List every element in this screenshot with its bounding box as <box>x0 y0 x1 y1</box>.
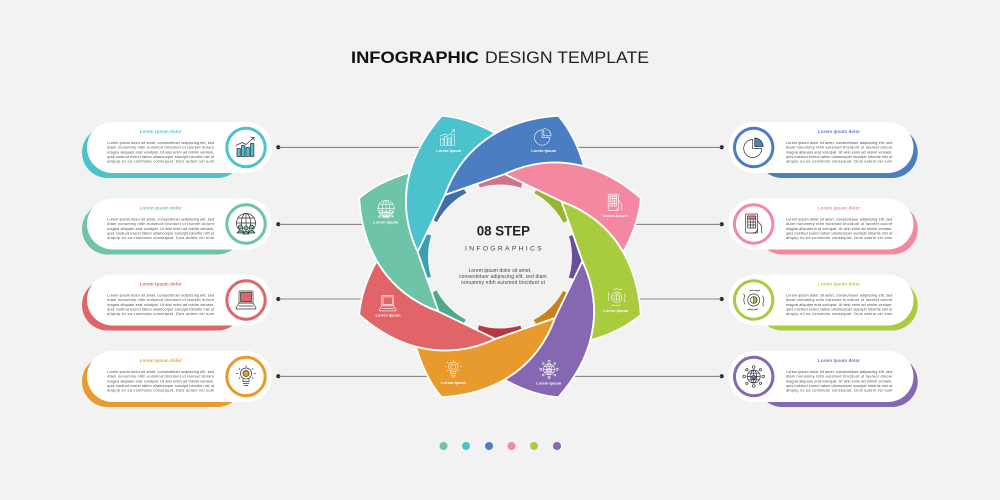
petal: teal <box>362 98 516 252</box>
petal: green <box>562 202 641 340</box>
panel: left card orange: Lorem ipsum dolor sit amet, consectetuer adipiscing elit, sed <box>107 370 214 374</box>
connector: network step <box>550 374 724 378</box>
panel: left card red: Lorem Ipsum dolor <box>140 282 182 287</box>
title: DESIGN TEMPLATE <box>485 48 649 67</box>
panel: left card mint: Lorem ipsum dolor sit amet, consectetuer adipiscing elit, sed <box>107 218 214 222</box>
panel: right card purple <box>728 351 918 407</box>
panel: right card blue: Lorem ipsum dolor sit amet, consectetuer adipiscing elit, sed <box>786 141 892 145</box>
panel: right card purple: quis nostrud exerci tation ullamcorper suscipit lobortis nisl ut <box>786 384 892 388</box>
pagination dots <box>440 442 561 450</box>
center text: 08 STEP <box>477 223 530 239</box>
panel: left card mint: Lorem Ipsum dolor <box>140 206 182 211</box>
panel: left card orange: diam nonummy nibh euismod tincidunt ut laoreet dolore <box>107 375 214 379</box>
panel: right card pink: aliquip ex ea commodo consequat. Duis autem vel eum <box>786 236 892 240</box>
petal label: blue pie: Lorem Ipsum <box>531 148 557 153</box>
flower diagram <box>341 98 659 415</box>
petal label: orange bulb <box>441 360 467 385</box>
panel: right card blue: Lorem Ipsum dolor <box>818 129 860 134</box>
petal label: teal chart: Lorem Ipsum <box>436 148 462 153</box>
panel: right card green: Lorem Ipsum dolor <box>818 282 860 287</box>
title <box>351 48 649 67</box>
petal label: pink calculator: Lorem Ipsum <box>603 213 628 218</box>
petal label: teal chart <box>436 130 462 153</box>
panel: right card purple: magna aliquam erat volutpat. Ut wisi enim ad minim veniam, <box>786 379 892 383</box>
panel: left card red: diam nonummy nibh euismod tincidunt ut laoreet dolore <box>107 298 214 302</box>
inner dark wedges <box>416 172 584 341</box>
panel: right card green: magna aliquam erat volutpat. Ut wisi enim ad minim veniam, <box>786 303 892 307</box>
panel: right card green: aliquip ex ea commodo consequat. Duis autem vel eum <box>786 312 892 316</box>
connector: gear step <box>600 297 724 301</box>
center circle <box>428 185 572 328</box>
panel: left card red: aliquip ex ea commodo consequat. Duis autem vel eum <box>107 312 214 316</box>
panel: left card teal: aliquip ex ea commodo consequat. Duis autem vel eum <box>107 160 214 164</box>
panel: right card pink: magna aliquam erat volutpat. Ut wisi enim ad minim veniam, <box>786 227 892 231</box>
petal label: red laptop: Lorem Ipsum <box>376 313 401 318</box>
title: INFOGRAPHIC <box>351 48 479 67</box>
center text <box>459 223 547 286</box>
panel: left card orange: aliquip ex ea commodo consequat. Duis autem vel eum <box>107 389 214 393</box>
connector: laptop step <box>276 297 400 301</box>
panel: left card mint: magna aliquam erat volutpat. Ut wisi enim ad minim veniam, <box>107 227 214 231</box>
panel: right card pink <box>728 198 918 254</box>
panel: left card teal: Lorem Ipsum dolor <box>140 129 182 134</box>
connector: chart step <box>276 145 440 149</box>
panel: left card mint <box>82 198 272 254</box>
petal: purple <box>484 261 638 415</box>
panel: right card purple: diam nonummy nibh euismod tincidunt ut laoreet dolore <box>786 375 892 379</box>
petal label: red laptop <box>376 296 401 318</box>
center text: Lorem ipsum dolor sit amet, <box>468 268 532 274</box>
petal label: purple network <box>536 360 562 385</box>
panel: left card red <box>82 274 272 330</box>
petal label: orange bulb: Lorem Ipsum <box>441 380 467 385</box>
panel: left card red: Lorem ipsum dolor sit amet, consectetuer adipiscing elit, sed <box>107 294 214 298</box>
panel: right card purple: aliquip ex ea commodo consequat. Duis autem vel eum <box>786 389 892 393</box>
panel: right card green: Lorem ipsum dolor sit amet, consectetuer adipiscing elit, sed <box>786 294 892 298</box>
panel: right card pink: diam nonummy nibh euismod tincidunt ut laoreet dolore <box>786 222 892 226</box>
panel: right card blue <box>728 122 918 178</box>
center text: INFOGRAPHICS <box>465 246 542 253</box>
center text: consectetuer adipiscing elit, sed diam <box>459 274 547 280</box>
panel: left card red: quis nostrud exerci tation ullamcorper suscipit lobortis nisl ut <box>107 308 214 312</box>
panel: left card teal: diam nonummy nibh euismod tincidunt ut laoreet dolore <box>107 146 214 150</box>
petal: red <box>341 241 495 395</box>
panel: left card orange <box>82 351 272 407</box>
center text: nonummy nibh euismod tincidunt ut <box>461 280 546 286</box>
panel: left card teal: quis nostrud exerci tation ullamcorper suscipit lobortis nisl ut <box>107 155 214 159</box>
petal label: green gear <box>603 289 629 313</box>
petal: orange <box>416 318 555 397</box>
petal label: green gear: Lorem Ipsum <box>603 308 629 313</box>
petal: blue <box>445 116 584 195</box>
panel: right card purple: Lorem ipsum dolor sit amet, consectetuer adipiscing elit, sed <box>786 370 892 374</box>
petal label: mint people globe: Lorem Ipsum <box>373 219 399 224</box>
petal label: pink calculator <box>603 194 628 218</box>
panel: right card pink: quis nostrud exerci tation ullamcorper suscipit lobortis nisl ut <box>786 232 892 236</box>
petal label: blue pie <box>531 129 557 153</box>
connector: bulb step <box>276 374 450 378</box>
panel: right card green <box>728 274 918 330</box>
panel: right card pink: Lorem ipsum dolor sit amet, consectetuer adipiscing elit, sed <box>786 218 892 222</box>
panel: left card orange: quis nostrud exerci tation ullamcorper suscipit lobortis nisl ut <box>107 384 214 388</box>
panel: right card green: quis nostrud exerci tation ullamcorper suscipit lobortis nisl ut <box>786 308 892 312</box>
panel: left card teal <box>82 122 272 178</box>
panel: left card teal: magna aliquam erat volutpat. Ut wisi enim ad minim veniam, <box>107 150 214 154</box>
panel: right card blue: magna aliquam erat volutpat. Ut wisi enim ad minim veniam, <box>786 150 892 154</box>
petal: pink <box>505 118 659 272</box>
petal label: mint people globe <box>373 200 399 224</box>
panel: left card mint: diam nonummy nibh euismod tincidunt ut laoreet dolore <box>107 222 214 226</box>
panel: right card pink: Lorem Ipsum dolor <box>818 206 860 211</box>
panel: left card mint: quis nostrud exerci tation ullamcorper suscipit lobortis nisl ut <box>107 232 214 236</box>
petal label: purple network: Lorem Ipsum <box>536 380 562 385</box>
connector: pie step <box>560 145 724 149</box>
panel: right card blue: quis nostrud exerci tation ullamcorper suscipit lobortis nisl ut <box>786 155 892 159</box>
panel: right card blue: diam nonummy nibh euismod tincidunt ut laoreet dolore <box>786 146 892 150</box>
connector: calculator step <box>600 222 724 226</box>
panel: right card blue: aliquip ex ea commodo consequat. Duis autem vel eum <box>786 160 892 164</box>
panel: left card teal: Lorem ipsum dolor sit amet, consectetuer adipiscing elit, sed <box>107 141 214 145</box>
panel: right card green: diam nonummy nibh euismod tincidunt ut laoreet dolore <box>786 298 892 302</box>
petal: mint <box>359 172 438 312</box>
connector: people globe step <box>276 222 400 226</box>
panel: left card orange: Lorem Ipsum dolor <box>140 358 182 363</box>
panel: left card mint: aliquip ex ea commodo consequat. Duis autem vel eum <box>107 236 214 240</box>
panel: right card purple: Lorem Ipsum dolor <box>818 358 860 363</box>
panel: left card red: magna aliquam erat volutpat. Ut wisi enim ad minim veniam, <box>107 303 214 307</box>
panel: left card orange: magna aliquam erat volutpat. Ut wisi enim ad minim veniam, <box>107 379 214 383</box>
